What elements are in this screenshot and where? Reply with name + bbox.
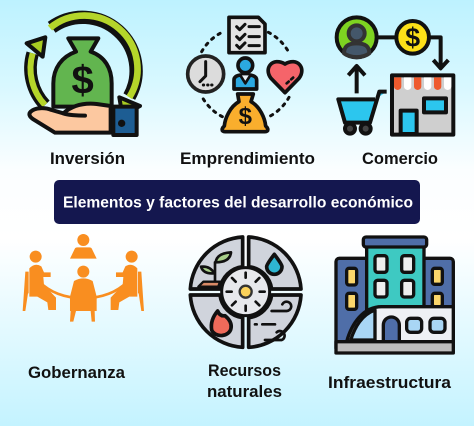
icon: money bag, hand and cycle arrows: $ [72, 58, 94, 102]
icon: money bag, hand and cycle arrows [27, 16, 140, 135]
title banner: Elementos y factores del desarrollo económico [63, 194, 413, 212]
label: Inversión: Inversión [50, 150, 125, 168]
label: Gobernanza: Gobernanza [28, 364, 126, 382]
icon: checklist, clock, heart, person and money bag [188, 17, 302, 132]
label: Infraestructura: Infraestructura [328, 374, 452, 392]
panel: Infraestructura [328, 237, 453, 392]
icon: customer, coin, cart and store: $ [405, 23, 420, 53]
icon: customer, coin, cart and store [337, 17, 453, 135]
label: Emprendimiento: Emprendimiento [180, 150, 315, 168]
panel: Recursos naturales: naturales [207, 383, 282, 401]
icon: natural resources wheel [190, 237, 301, 347]
panel: Gobernanza [23, 234, 144, 382]
panel: Comercio [337, 17, 453, 168]
label: Comercio: Comercio [362, 150, 438, 168]
icon: checklist, clock, heart, person and money bag: $ [239, 103, 252, 130]
panel: Recursos naturales [190, 237, 301, 401]
label: Recursos naturales: Recursos [208, 362, 281, 380]
panel: Emprendimiento [180, 17, 315, 168]
icon: buildings and train [336, 237, 453, 353]
panel: Inversión [27, 16, 140, 168]
icon: people around a table [23, 234, 144, 322]
title banner [54, 180, 420, 224]
